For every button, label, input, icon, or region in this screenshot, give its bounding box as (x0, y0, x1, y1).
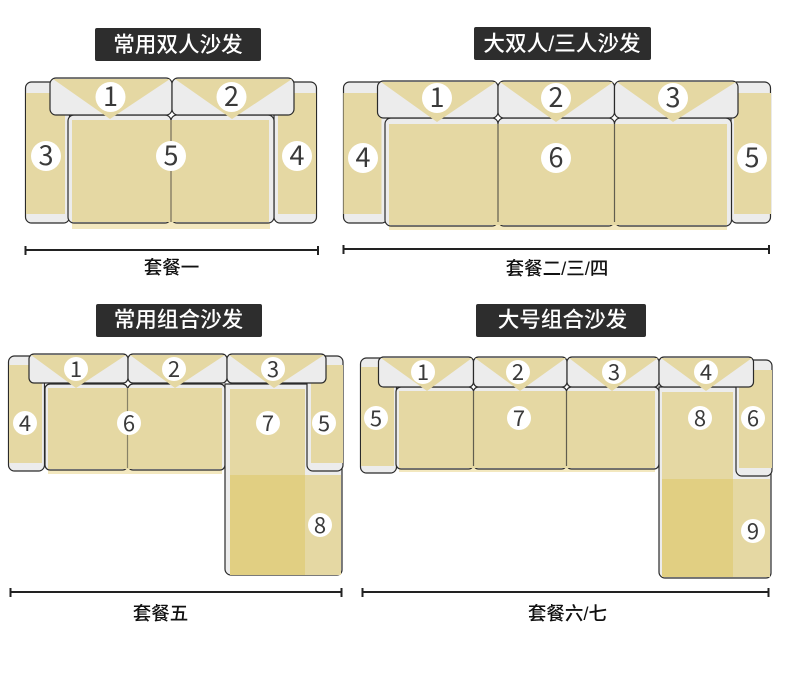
sofa diagram: sectional: 5 (318, 406, 330, 438)
heading: common sectional sofa: 常用组合沙发 (114, 307, 243, 332)
heading: common two-seat sofa (95, 28, 261, 61)
heading: large sectional sofa: 大号组合沙发 (498, 307, 627, 332)
package label: 套餐五 (133, 603, 188, 624)
sofa diagram: large sectional (360, 355, 772, 578)
sofa diagram: sectional: 2 (168, 352, 180, 384)
sofa diagram: large sectional: 1 (417, 355, 429, 387)
heading: large sectional sofa (476, 304, 646, 337)
sofa diagram: two-seat (26, 75, 316, 229)
heading: common two-seat sofa: 常用双人沙发 (113, 32, 243, 57)
sofa diagram: large sectional: 3 (608, 355, 620, 387)
panel: common two-seat sofa (25, 28, 318, 278)
sofa diagram: two-seat: 5 (164, 134, 178, 173)
package label: 套餐二/三/四 (506, 258, 608, 279)
panel: large sectional sofa (360, 304, 772, 624)
sofa diagram: three-seat: 3 (666, 76, 680, 115)
sofa diagram: large sectional: 9 (747, 514, 759, 546)
package label: 套餐六/七 (528, 603, 607, 624)
dimension ruler (10, 588, 342, 597)
sofa diagram: sectional: 7 (262, 406, 274, 438)
sofa diagram: sectional: 3 (267, 352, 279, 384)
sofa diagram: sectional: 8 (314, 508, 326, 540)
sofa diagram: sectional (8, 352, 343, 575)
panel: large two-seat / three-seat sofa (343, 27, 771, 279)
dimension ruler (25, 246, 318, 255)
sofa diagram: sectional: 1 (70, 352, 82, 384)
sofa diagram: large sectional: 8 (694, 401, 706, 433)
sofa diagram: three-seat (344, 76, 771, 230)
heading: large two-seat / three-seat sofa (474, 27, 651, 60)
sofa diagram: two-seat: 2 (224, 75, 239, 114)
panel: common sectional sofa (8, 304, 343, 624)
dimension ruler (343, 245, 769, 254)
sofa diagram: three-seat: 6 (548, 136, 564, 175)
sofa diagram: large sectional: 5 (370, 401, 382, 433)
sofa diagram: three-seat: 1 (430, 76, 444, 115)
sofa diagram: two-seat: 1 (103, 75, 118, 114)
dimension ruler (362, 588, 769, 597)
sofa diagram: sectional: 4 (19, 406, 31, 438)
sofa diagram: three-seat: 4 (356, 136, 370, 175)
package label: 套餐一 (144, 257, 199, 278)
sofa diagram: three-seat: 5 (744, 136, 760, 175)
sofa diagram: large sectional: 2 (512, 355, 524, 387)
sofa diagram: two-seat: 3 (38, 134, 54, 173)
sofa diagram: sectional: 6 (123, 406, 135, 438)
heading: large two-seat / three-seat sofa: 大双人/三人沙发 (483, 31, 641, 56)
sofa diagram: large sectional: 7 (513, 401, 525, 433)
sofa diagram: large sectional: 4 (700, 355, 712, 387)
sofa diagram: three-seat: 2 (548, 76, 564, 115)
heading: common sectional sofa (96, 304, 262, 337)
sofa diagram: two-seat: 4 (290, 134, 304, 173)
sofa diagram: large sectional: 6 (747, 401, 759, 433)
